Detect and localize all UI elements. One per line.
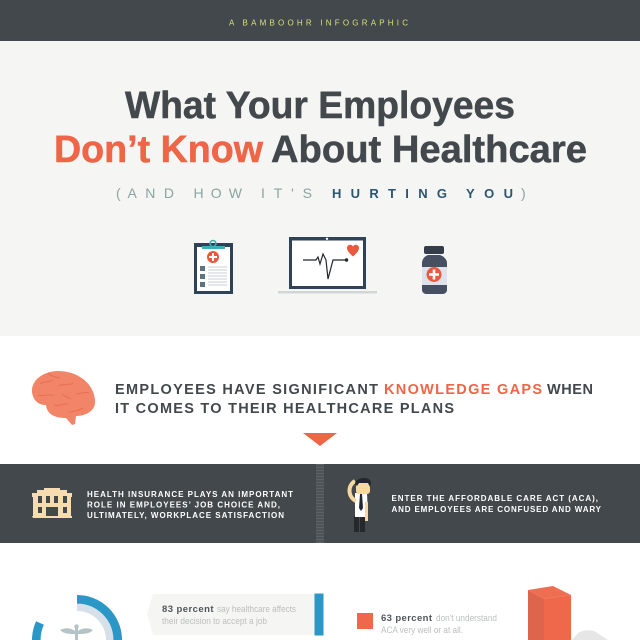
callout: 83 percent: say healthcare affects: [217, 604, 296, 615]
legend: 63 percent: ACA very well or at all.: [381, 625, 463, 636]
section heading: WHEN: [547, 382, 593, 398]
chart: 3D bar: [528, 586, 608, 640]
text: job choice: HEALTH INSURANCE PLAYS AN IMPORTANT: [87, 490, 293, 499]
icon: brain: [32, 371, 95, 425]
icon: clipboard: [194, 240, 233, 294]
arrow: down triangle: [303, 433, 337, 446]
icon: laptop with heartbeat: [278, 237, 377, 294]
text: ACA confusion: AND EMPLOYEES ARE CONFUSED AND WARY: [392, 505, 602, 514]
title: Don’t Know: [54, 129, 263, 171]
panel: dark band: [0, 464, 640, 543]
section heading: EMPLOYEES HAVE SIGNIFICANT: [115, 382, 378, 398]
chart: 83 percent donut: [36, 599, 118, 640]
section heading: KNOWLEDGE GAPS: [384, 382, 542, 398]
text: ACA confusion: [392, 494, 602, 514]
subtitle: IT'S: [261, 185, 312, 201]
panel: hero: [0, 41, 640, 336]
legend: 63 percent: don't understand: [436, 613, 497, 624]
text: job choice: ULTIMATELY, WORKPLACE SATISFACTION: [87, 511, 284, 520]
section heading: IT COMES TO THEIR HEALTHCARE PLANS: [115, 401, 454, 417]
subtitle: AND: [128, 185, 174, 201]
legend: 63 percent: [357, 613, 497, 636]
icon: medicine bottle: [422, 246, 447, 294]
subtitle: YOU: [466, 186, 513, 201]
legend: 63 percent: 63 percent: [381, 613, 433, 624]
subtitle: HURTING: [332, 186, 447, 201]
title: What Your Employees: [125, 85, 515, 127]
callout: 83 percent: 83 percent: [162, 604, 214, 615]
callout: 83 percent: their decision to accept a job: [162, 616, 267, 627]
text: job choice: [87, 490, 293, 520]
icon: caduceus: [60, 624, 93, 640]
subtitle: ): [521, 185, 526, 201]
title: [54, 85, 587, 171]
section heading: [115, 382, 593, 417]
top banner: A BAMBOOHR INFOGRAPHIC: [229, 18, 408, 28]
icon: office building: [32, 488, 72, 518]
icon: confused employee: [349, 478, 371, 532]
subtitle: HOW: [194, 185, 243, 201]
top banner: [0, 0, 640, 41]
text: ACA confusion: ENTER THE AFFORDABLE CARE ACT (ACA),: [392, 494, 598, 503]
title: About Healthcare: [271, 129, 587, 171]
callout: 83 percent: [147, 594, 324, 636]
subtitle: [116, 185, 526, 201]
text: job choice: ROLE IN EMPLOYEES’ JOB CHOICE AND,: [87, 500, 280, 510]
subtitle: (: [116, 185, 121, 201]
